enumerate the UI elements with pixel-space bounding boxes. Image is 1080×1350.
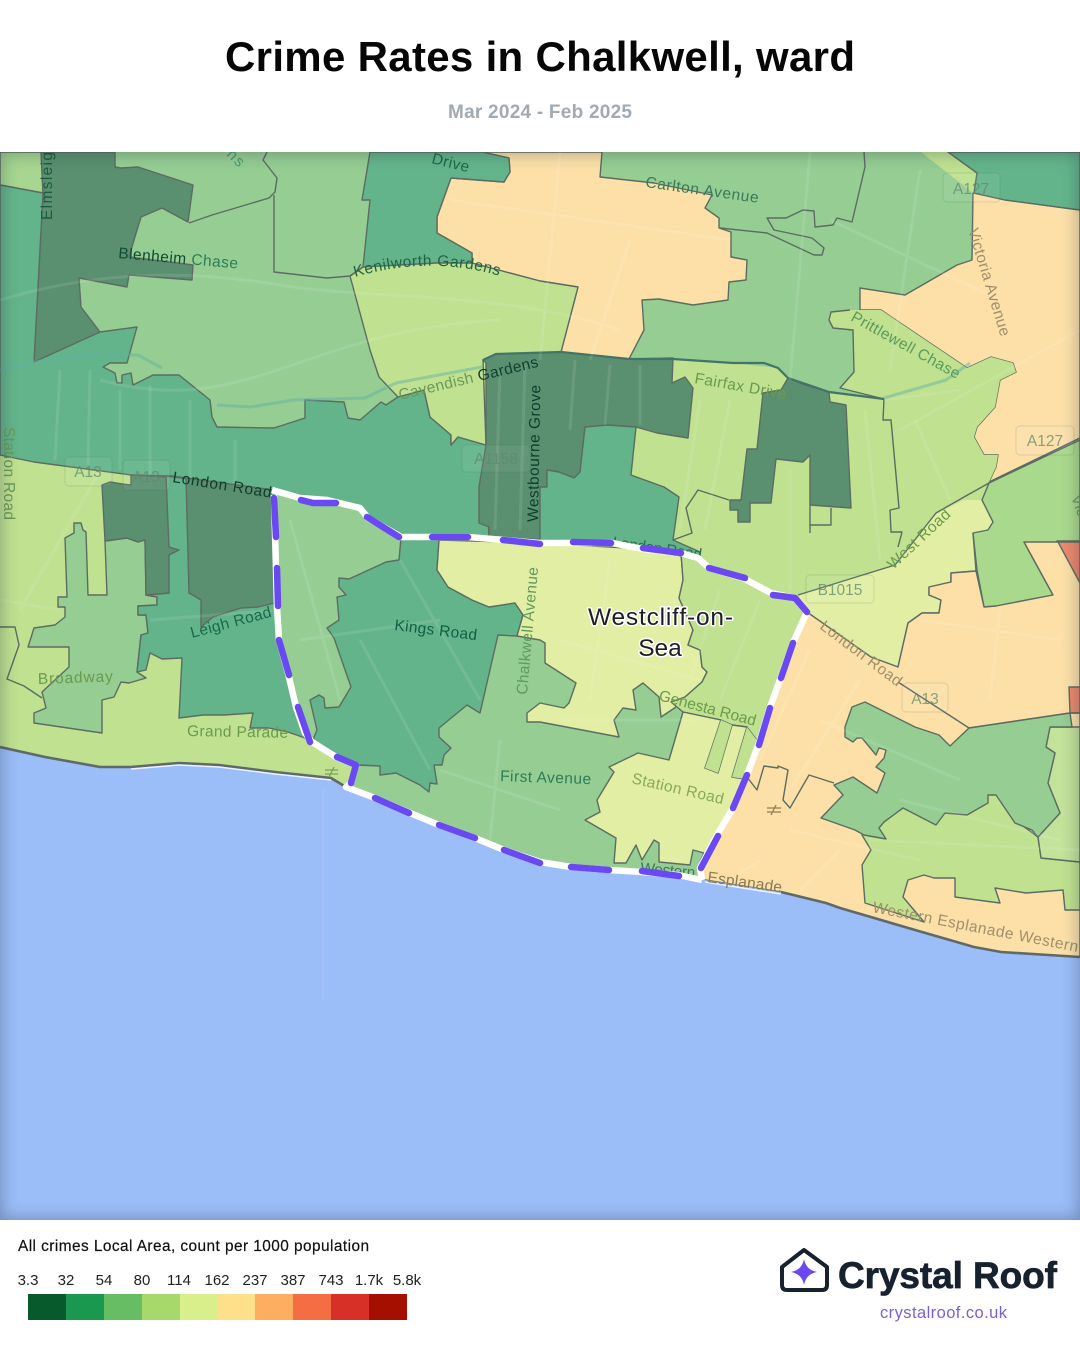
road labels: Broadway: [38, 668, 113, 688]
area: lime far east: [1038, 727, 1080, 862]
shoreline stroke: [0, 747, 1080, 957]
logo: Crystal Roof: [780, 1248, 1058, 1322]
area: cream north: [437, 152, 747, 359]
road labels: Fairfax Drive: [693, 370, 788, 403]
boundary: Fairfax ridge line: [483, 352, 884, 399]
legend scale labels: 3.3: [18, 1272, 38, 1289]
wordmark: Crystal Roof: [838, 1255, 1058, 1296]
area: cream north-east: [860, 193, 1080, 482]
legend colour bar: [28, 1294, 407, 1320]
road shields: A13: [132, 469, 160, 486]
area: top-right strip: [921, 152, 977, 193]
road shields: B1015: [818, 582, 862, 599]
sea: [0, 747, 1080, 1220]
road labels: First Avenue: [500, 768, 591, 788]
road labels: London Road: [171, 469, 273, 502]
area: ward lime fingers: [705, 720, 759, 779]
area: Prittlewell lime: [829, 310, 1016, 497]
legend scale labels: 387: [280, 1272, 306, 1289]
area: lime south-east: [862, 792, 1080, 922]
area: ward lime east: [671, 553, 807, 743]
title: Crime Rates in Chalkwell, ward: [225, 33, 855, 80]
road labels: West Road: [884, 506, 954, 573]
road labels: Western Esplanade Western: [871, 899, 1080, 956]
road labels: Station Road: [0, 427, 17, 520]
area: salmon high crime blocks: [1058, 542, 1080, 713]
area: western mid green band: [0, 185, 489, 540]
road labels: Chalkwell Avenue: [514, 566, 542, 695]
river: faint stream: [0, 355, 970, 407]
legend scale labels: [18, 1272, 422, 1289]
area: green east of West Road: [973, 438, 1080, 607]
area: south-west Broadway green: [28, 523, 157, 733]
road labels: Carlton Avenue: [644, 174, 760, 207]
area: cream notch lines: [747, 766, 834, 808]
area: centre dark: [479, 352, 693, 540]
area: ward pale lime north: [437, 540, 707, 737]
area: pale lime West Road: [798, 500, 993, 667]
legend scale labels: 162: [204, 1272, 230, 1289]
road shields: A1158: [474, 451, 518, 468]
road labels: Westbourne Grove: [525, 385, 544, 522]
area: London Road line east: [898, 682, 1080, 728]
map edge shading: [0, 152, 1080, 1220]
area: cream east of ward: [700, 542, 1080, 960]
road labels: [0, 152, 1080, 956]
road labels: Victoria Avenue: [964, 226, 1013, 338]
area: Fairfax dark: [730, 378, 851, 522]
area: south-west mid green: [137, 476, 305, 738]
panel: choropleth map: [0, 152, 1080, 1220]
base land: [0, 152, 1080, 1220]
road shields: A13: [74, 464, 102, 481]
legend scale labels: 1.7k: [355, 1272, 384, 1289]
road shields: [65, 173, 1074, 712]
boundary: left small lines: [0, 627, 42, 698]
road labels: Esplanade: [706, 869, 783, 896]
legend: [18, 1238, 422, 1320]
area: dark north-west: [34, 152, 193, 362]
ward boundary: purple dashes: [274, 498, 807, 876]
legend title: All crimes Local Area, count per 1000 population: [18, 1238, 369, 1255]
area: dark block east: [186, 478, 275, 627]
area: top-left corner: [0, 152, 43, 193]
road labels: Prittlewell Chase: [848, 309, 963, 383]
area: centre mid green: [540, 425, 700, 560]
area: ward Kings Road green: [310, 538, 523, 792]
legend scale labels: 237: [242, 1272, 268, 1289]
road labels: Leigh Road: [189, 604, 273, 642]
area: northern band: [0, 152, 1080, 483]
area: dark block west: [102, 475, 179, 595]
website url: crystalroof.co.uk: [880, 1304, 1008, 1322]
area: ward pale lime Station Road: [585, 712, 755, 865]
legend scale labels: 54: [96, 1272, 112, 1289]
road shields: A127: [953, 181, 989, 198]
pier line in sea: [322, 790, 324, 1000]
place label: Westcliff-on-Sea: Sea: [638, 635, 682, 662]
area: top-right green: [948, 152, 1080, 210]
road labels: London Road: [611, 534, 703, 563]
boundaries: northern and central lines: [189, 152, 1080, 667]
place label: Westcliff-on-Sea: Westcliff-on-: [588, 604, 733, 631]
legend scale labels: 80: [134, 1272, 150, 1289]
roads: faint street lines: [0, 152, 1080, 890]
coastline: [0, 747, 1080, 1220]
legend scale labels: 5.8k: [393, 1272, 422, 1289]
road labels: Kings Road: [394, 617, 478, 644]
area: Kenilworth lime: [350, 263, 578, 445]
area: ward base: [272, 490, 807, 880]
road labels: Western: [640, 860, 696, 882]
road labels: Station Road: [630, 770, 726, 808]
legend scale labels: 743: [318, 1272, 344, 1289]
ward boundary: white line: [272, 490, 807, 880]
road shields: A127: [1027, 433, 1063, 450]
road shields: A13: [911, 691, 939, 708]
area: mid green north: [362, 152, 510, 267]
icon: house with star: [782, 1250, 827, 1290]
subtitle: date range: Mar 2024 - Feb 2025: [448, 102, 632, 123]
legend scale labels: 114: [167, 1272, 191, 1289]
shoreline white sliver: [131, 765, 781, 894]
road labels: Genesta Road: [657, 687, 758, 730]
road labels: Grand Parade: [187, 723, 288, 742]
road labels: Blenheim Chase: [118, 245, 239, 272]
road labels: London Road: [817, 618, 905, 690]
legend scale labels: 32: [58, 1272, 74, 1289]
road labels: Kenilworth Gardens: [353, 254, 500, 276]
place label: Westcliff-on-Sea: [588, 604, 733, 662]
road labels: Cavendish Gardens: [397, 354, 540, 404]
icon: rail stations: [325, 767, 781, 815]
boundary: Prittlewell lime outline: [829, 310, 884, 399]
area: green south-east: [821, 702, 1072, 839]
